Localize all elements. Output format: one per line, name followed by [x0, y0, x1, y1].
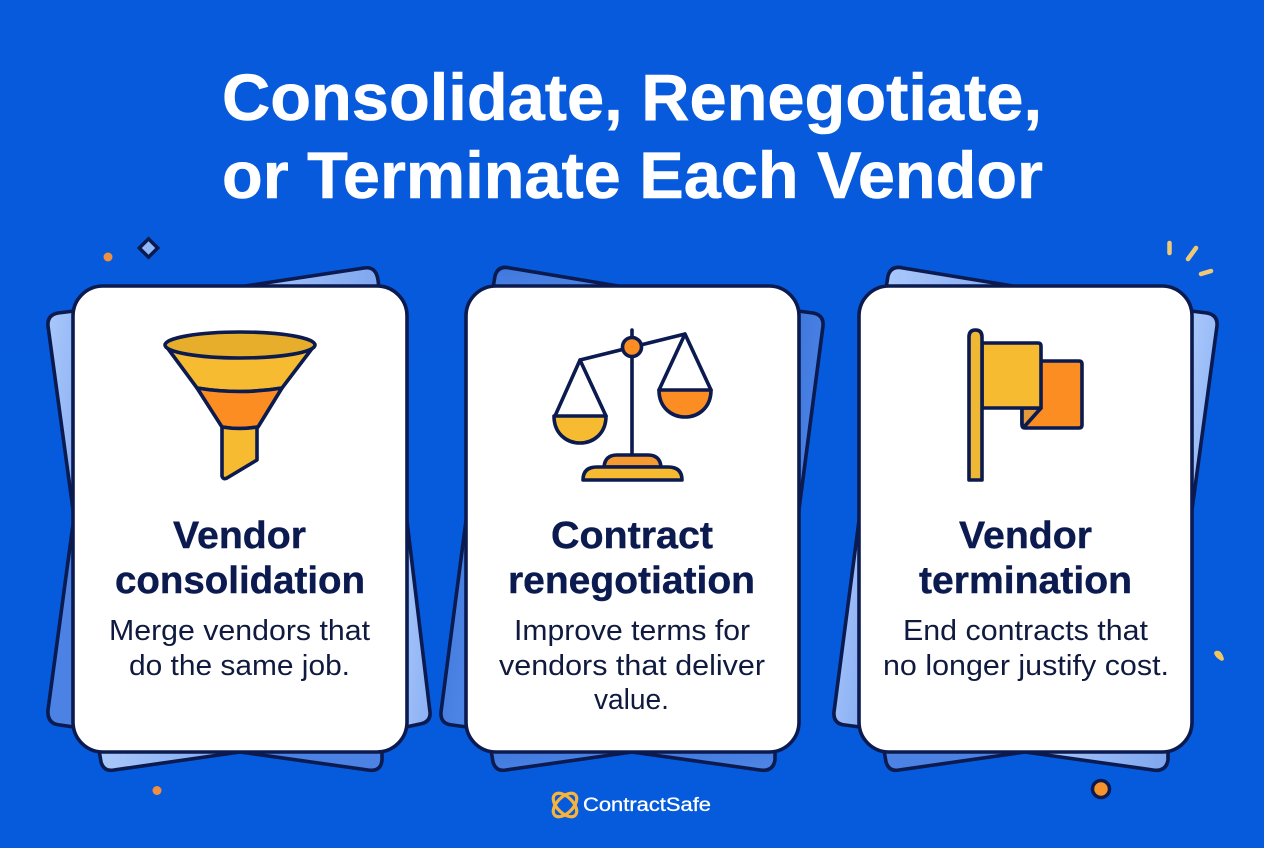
title: [222, 60, 1043, 212]
text: renegotiation description: [499, 615, 765, 716]
heading: contract renegotiation: Contract: [551, 515, 713, 557]
icon: funnel: [165, 332, 315, 479]
heading: vendor consolidation: [115, 515, 365, 602]
panel: vendor consolidation: [48, 268, 430, 770]
card: consolidation: [73, 286, 407, 752]
decorative mark: ringed dot lower right: [1092, 780, 1110, 798]
title: or Terminate Each Vendor: [222, 138, 1043, 212]
decorative mark: orange dot lower left: [152, 786, 162, 795]
stacked back cards: renegotiation: [441, 267, 823, 770]
icon: balance scale: [554, 330, 711, 480]
stacked back cards: consolidation: [48, 268, 430, 770]
card: termination: [859, 286, 1192, 752]
logo: ContractSafe: ContractSafe: [583, 794, 711, 816]
text: renegotiation description: vendors that deliver: [499, 650, 765, 682]
text: renegotiation description: value.: [594, 684, 669, 716]
decorative marks: sparkle upper right: [1170, 243, 1211, 274]
text: renegotiation description: Improve terms for: [514, 615, 750, 647]
text: consolidation description: Merge vendors that: [109, 615, 370, 647]
heading: contract renegotiation: renegotiation: [508, 560, 755, 602]
stacked back cards: termination: [834, 267, 1217, 770]
heading: vendor termination: termination: [919, 560, 1132, 602]
icon: logo knot: [549, 789, 581, 821]
panel: contract renegotiation: [441, 267, 823, 770]
heading: vendor consolidation: Vendor: [173, 515, 306, 557]
icon: flag: [969, 330, 1082, 480]
text: termination description: no longer justify cost.: [883, 650, 1169, 682]
text: termination description: [883, 615, 1169, 682]
text: consolidation description: [109, 615, 370, 682]
decorative mark: yellow chip right: [1214, 651, 1224, 661]
heading: vendor termination: Vendor: [959, 515, 1092, 557]
text: termination description: End contracts that: [903, 615, 1148, 647]
heading: contract renegotiation: [508, 515, 755, 602]
text: consolidation description: do the same job.: [129, 650, 350, 682]
panel: vendor termination: [834, 267, 1217, 770]
heading: vendor consolidation: consolidation: [115, 560, 365, 602]
title: Consolidate, Renegotiate,: [222, 60, 1042, 134]
decorative marks: upper left: [104, 239, 158, 262]
logo: ContractSafe: [549, 789, 711, 821]
heading: vendor termination: [919, 515, 1132, 602]
card: renegotiation: [466, 286, 799, 752]
